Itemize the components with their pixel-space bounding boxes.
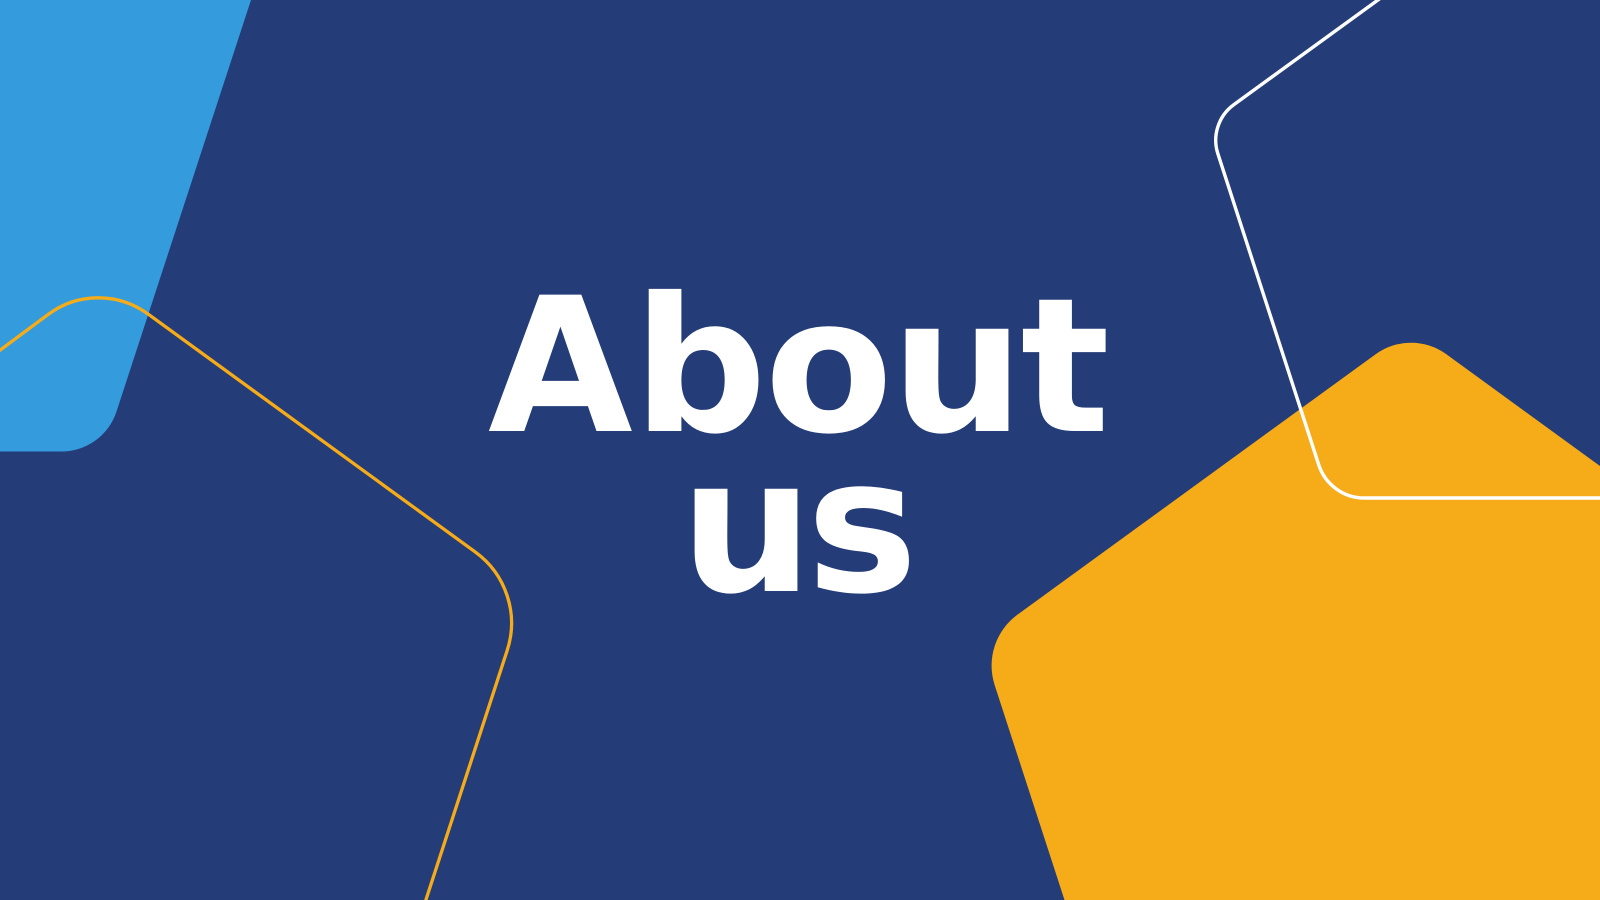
title — [488, 258, 1110, 636]
light blue pentagon shape, top left — [0, 0, 251, 452]
white outline pentagon, top right — [1216, 0, 1600, 498]
orange pentagon shape, bottom right — [992, 343, 1600, 900]
title: About — [488, 258, 1110, 476]
title: us — [680, 418, 918, 636]
orange outline pentagon, left — [0, 298, 512, 900]
